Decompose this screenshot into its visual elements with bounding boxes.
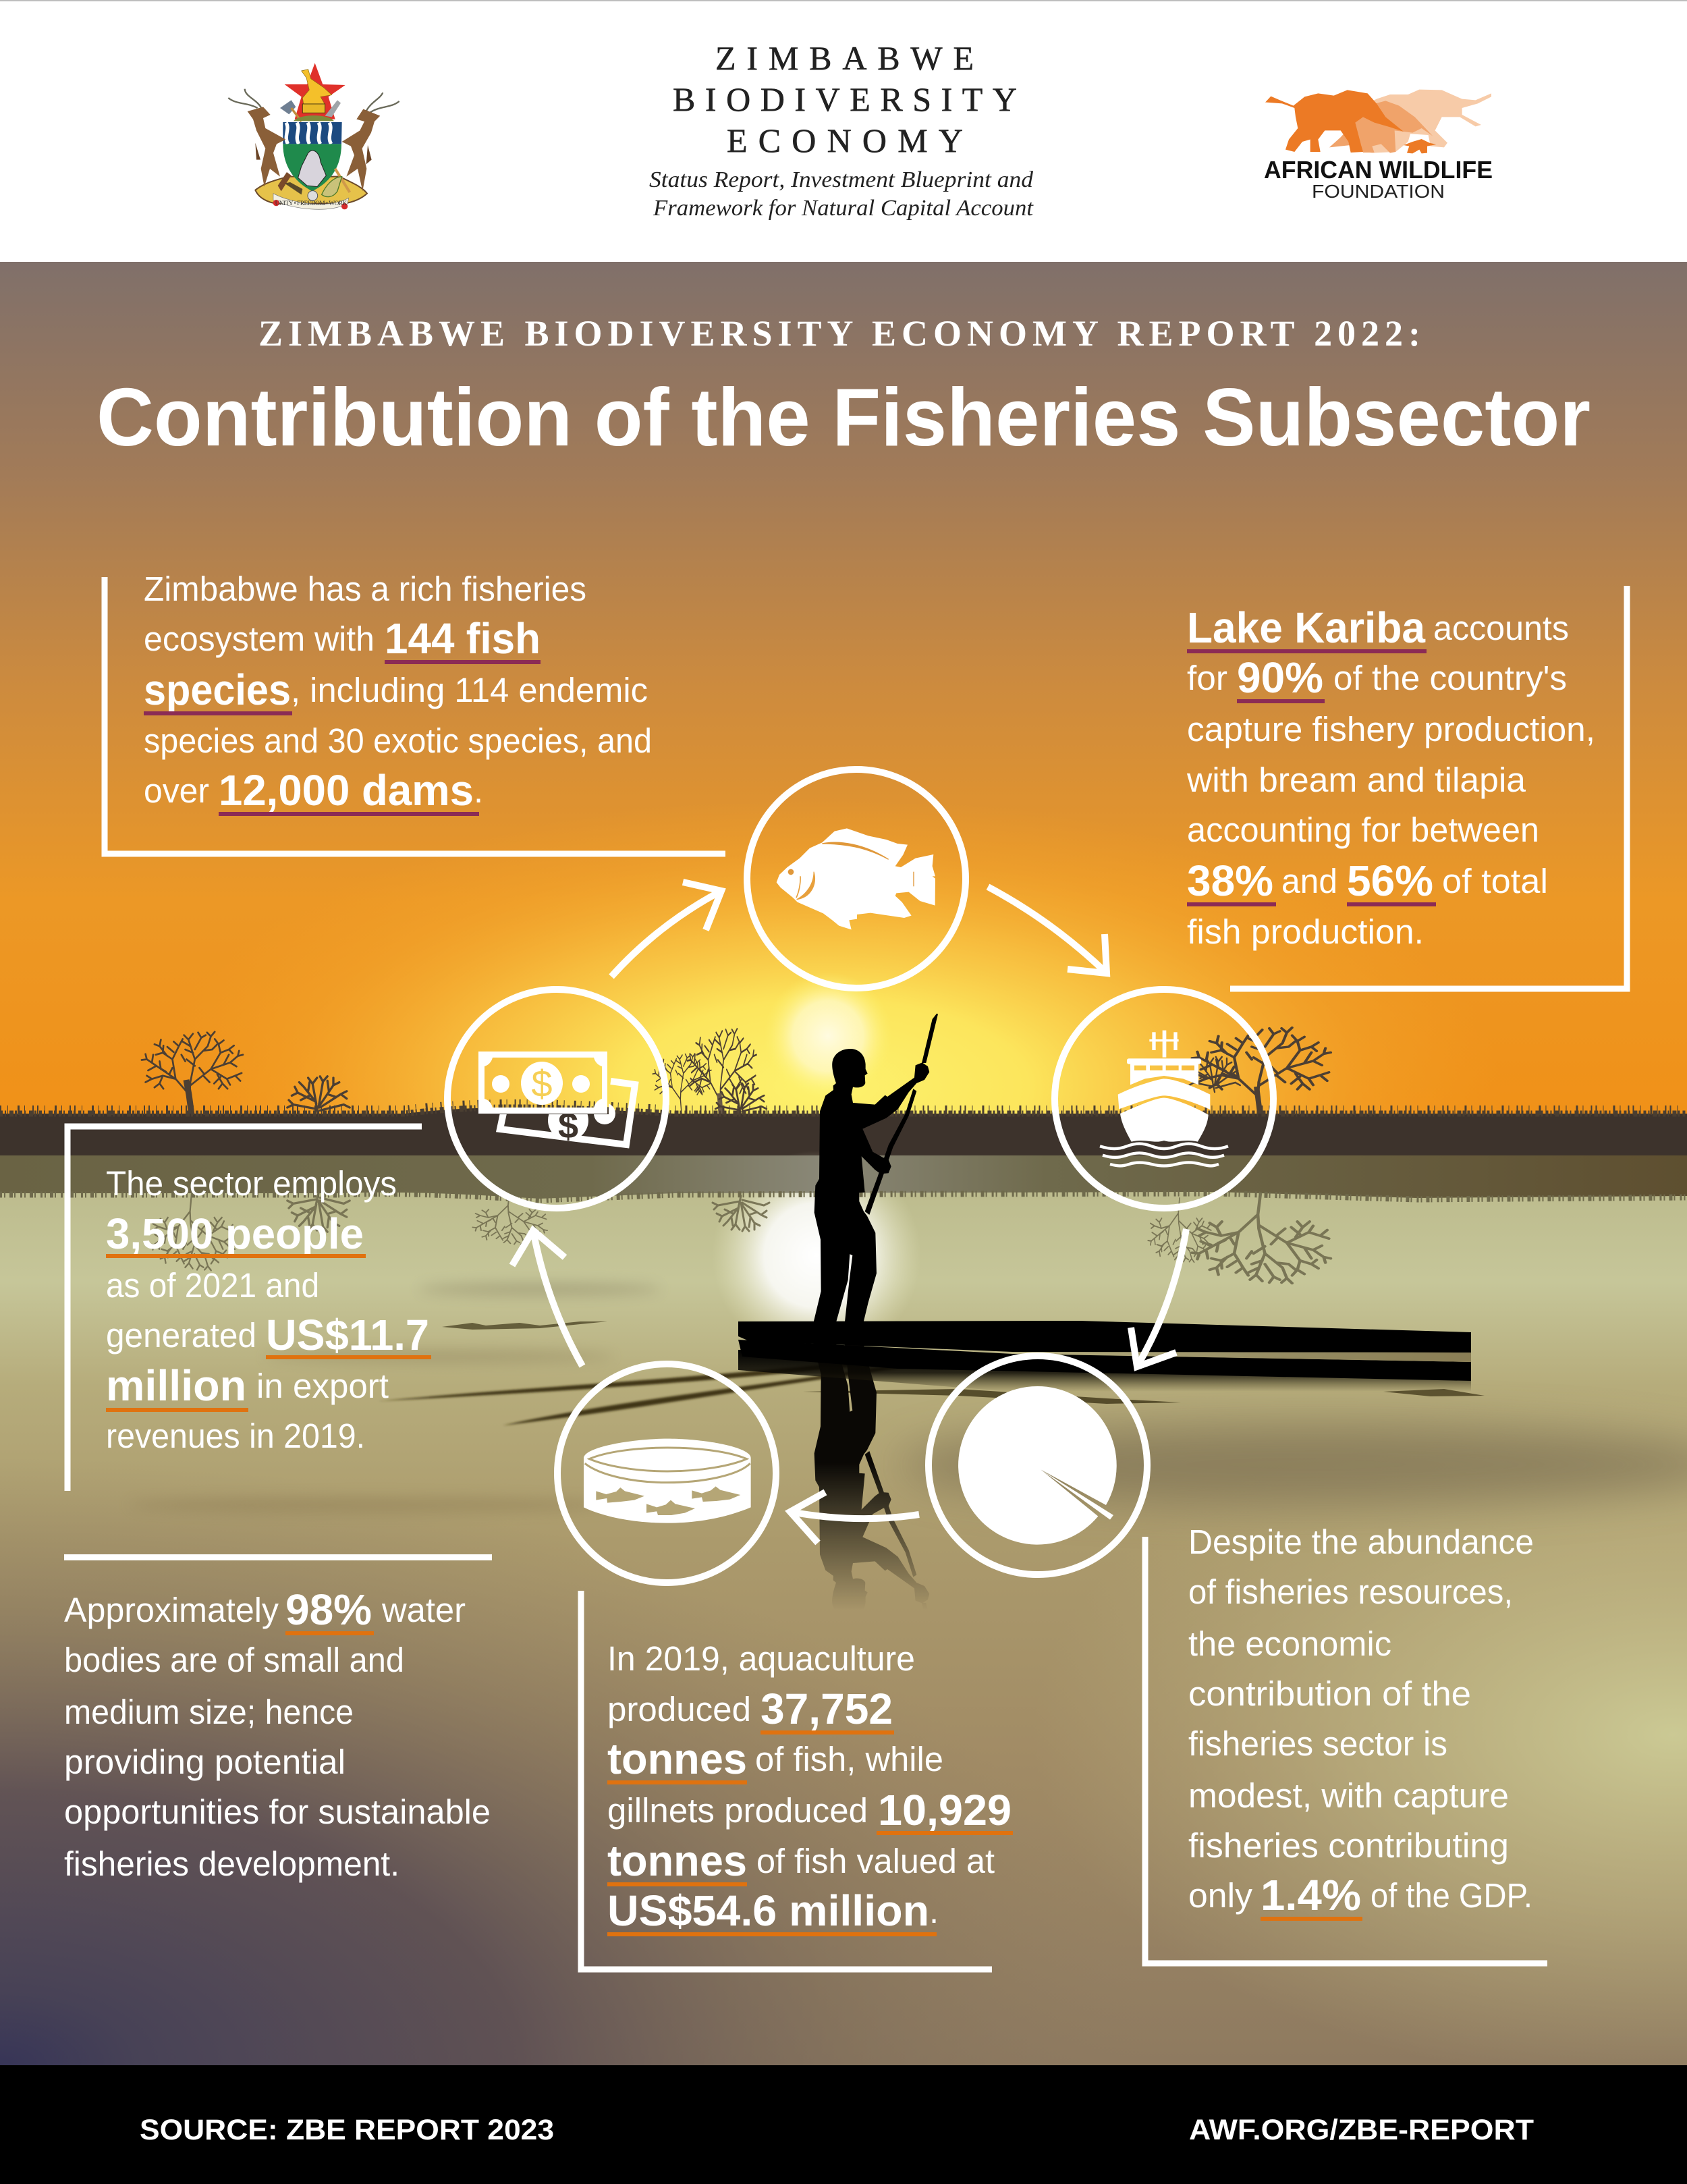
panel: aquaculture: tonnes [607, 1836, 747, 1885]
canoe [738, 1321, 1471, 1392]
logo: Zimbabwe coat of arms [228, 63, 399, 209]
panel: economic contribution: of the GDP. [1371, 1876, 1532, 1915]
panel: Lake Kariba: accounting for between [1187, 811, 1539, 849]
icon: money in circle [447, 989, 666, 1208]
panel: Lake Kariba: accounts [1433, 609, 1569, 647]
footer: SOURCE: ZBE REPORT 2023 [140, 2114, 554, 2146]
panel: employment: as of 2021 and [106, 1266, 319, 1305]
panel: water bodies: providing potential [64, 1743, 345, 1781]
title block: ZIMBABWE BIODIVERSITY ECONOMY REPORT 2022: [258, 313, 1420, 354]
title block: Contribution of the Fisheries Subsector [96, 371, 1591, 463]
heading: report name: ECONOMY [727, 121, 963, 159]
panel: Lake Kariba: capture fishery production, [1187, 710, 1595, 748]
panel: employment [67, 1126, 431, 1491]
logo: African Wildlife Foundation [1264, 90, 1493, 202]
water [0, 1155, 1687, 2065]
front banknote [478, 1052, 607, 1114]
panel: Lake Kariba [1186, 586, 1627, 989]
panel: fish species: ecosystem with [144, 620, 375, 658]
logo: African Wildlife Foundation: AFRICAN WILDLIFE [1264, 156, 1493, 184]
panel: economic contribution [1145, 1523, 1547, 1963]
panel: water bodies: opportunities for sustainable [64, 1793, 491, 1831]
panel: Lake Kariba: fish production. [1187, 912, 1424, 951]
man reflection [814, 1343, 929, 1602]
header band [0, 0, 1687, 262]
trees on shore [142, 1028, 1331, 1123]
panel: fish species: Zimbabwe has a rich fisheries [144, 570, 586, 608]
panel: water bodies: 98% [285, 1585, 372, 1634]
panel: employment: generated [106, 1316, 256, 1355]
panel: water bodies: bodies are of small and [64, 1641, 404, 1679]
panel: fish species: species [144, 665, 291, 714]
panel: aquaculture: of fish, while [755, 1740, 943, 1778]
panel: aquaculture: tonnes [607, 1735, 747, 1783]
panel: economic contribution: modest, with capture [1188, 1776, 1509, 1815]
icon: boat in circle [1055, 989, 1273, 1208]
footer [0, 2065, 1687, 2184]
panel: aquaculture: US$54.6 million [607, 1886, 929, 1935]
panel: fish species: 144 fish [385, 614, 541, 663]
panel: economic contribution: fisheries contributing [1188, 1826, 1509, 1865]
panel: Lake Kariba: 56% [1347, 856, 1433, 905]
back banknote [500, 1081, 635, 1146]
panel: Lake Kariba: of the country's [1333, 659, 1567, 697]
panel: water bodies: Approximately [64, 1591, 279, 1629]
panel: aquaculture: of fish valued at [756, 1842, 995, 1880]
panel: Lake Kariba: with bream and tilapia [1186, 761, 1526, 799]
panel: employment: US$11.7 [266, 1311, 429, 1359]
panel: economic contribution: contribution of the [1188, 1674, 1471, 1713]
panel: fish species: 12,000 dams [219, 766, 474, 815]
icon: fish in circle [747, 769, 966, 988]
panel: aquaculture [581, 1591, 1013, 1969]
heading: report name: Framework for Natural Capital Account [653, 196, 1034, 221]
panel: economic contribution: only [1188, 1876, 1253, 1915]
panel: employment: revenues in 2019. [106, 1417, 365, 1455]
panel: fish species: over [144, 771, 209, 810]
panel: fish species: species and 30 exotic species, and [144, 721, 652, 760]
reflection band [0, 1155, 1687, 1200]
icon: fish cage in circle [557, 1364, 776, 1583]
panel: economic contribution: 1.4% [1261, 1871, 1361, 1919]
shore band with grass [0, 1104, 1687, 1155]
panel: aquaculture: 10,929 [878, 1786, 1012, 1834]
fisherman silhouette with pole [813, 1014, 938, 1324]
panel: water bodies: water [381, 1591, 466, 1629]
panel: fish species [105, 570, 725, 854]
panel: Lake Kariba: 90% [1237, 653, 1323, 702]
title block [96, 313, 1591, 463]
canoe ripples [378, 1321, 1485, 1425]
heading: report name: Status Report, Investment Blueprint and [649, 167, 1034, 192]
panel: water bodies: fisheries development. [64, 1845, 399, 1883]
panel: employment: million [106, 1361, 246, 1410]
logo: African Wildlife Foundation: FOUNDATION [1312, 181, 1445, 202]
cycle arrows [512, 882, 1186, 1543]
front banknote: $ [531, 1062, 553, 1105]
tree reflections [150, 1193, 1331, 1283]
panel: fish species: . [474, 771, 483, 810]
panel: economic contribution: of fisheries resources, [1188, 1573, 1513, 1611]
panel: employment: in export [256, 1367, 389, 1405]
panel: aquaculture: In 2019, aquaculture [607, 1639, 915, 1678]
heading: report name [649, 39, 1034, 221]
icon: pie chart in circle [929, 1356, 1147, 1575]
panel: employment: 3,500 people [106, 1209, 364, 1258]
panel: Lake Kariba: 38% [1187, 856, 1273, 905]
panel: economic contribution: the economic [1188, 1625, 1391, 1663]
panel: aquaculture: 37,752 [760, 1685, 893, 1733]
panel: employment: The sector employs [106, 1164, 397, 1203]
panel: economic contribution: fisheries sector is [1188, 1724, 1447, 1763]
panel: Lake Kariba: Lake Kariba [1187, 603, 1425, 652]
panel: water bodies [64, 1554, 492, 1883]
logo: Zimbabwe coat of arms: UNITY • FREEDOM • WORK [275, 200, 348, 207]
panel: fish species: , including 114 endemic [291, 671, 648, 709]
panel: aquaculture: produced [607, 1690, 751, 1728]
panel: aquaculture: gillnets produced [607, 1791, 868, 1830]
panel: Lake Kariba: and [1281, 862, 1337, 900]
heading: report name: ZIMBABWE [715, 39, 974, 77]
panel: economic contribution: Despite the abundance [1188, 1523, 1534, 1561]
panel: water bodies: medium size; hence [64, 1693, 354, 1731]
footer: AWF.ORG/ZBE-REPORT [1189, 2114, 1534, 2146]
heading: report name: BIODIVERSITY [673, 80, 1017, 118]
back banknote: $ [558, 1105, 578, 1146]
panel: Lake Kariba: for [1187, 659, 1227, 697]
panel: aquaculture: . [929, 1892, 939, 1930]
panel: Lake Kariba: of total [1442, 862, 1548, 900]
